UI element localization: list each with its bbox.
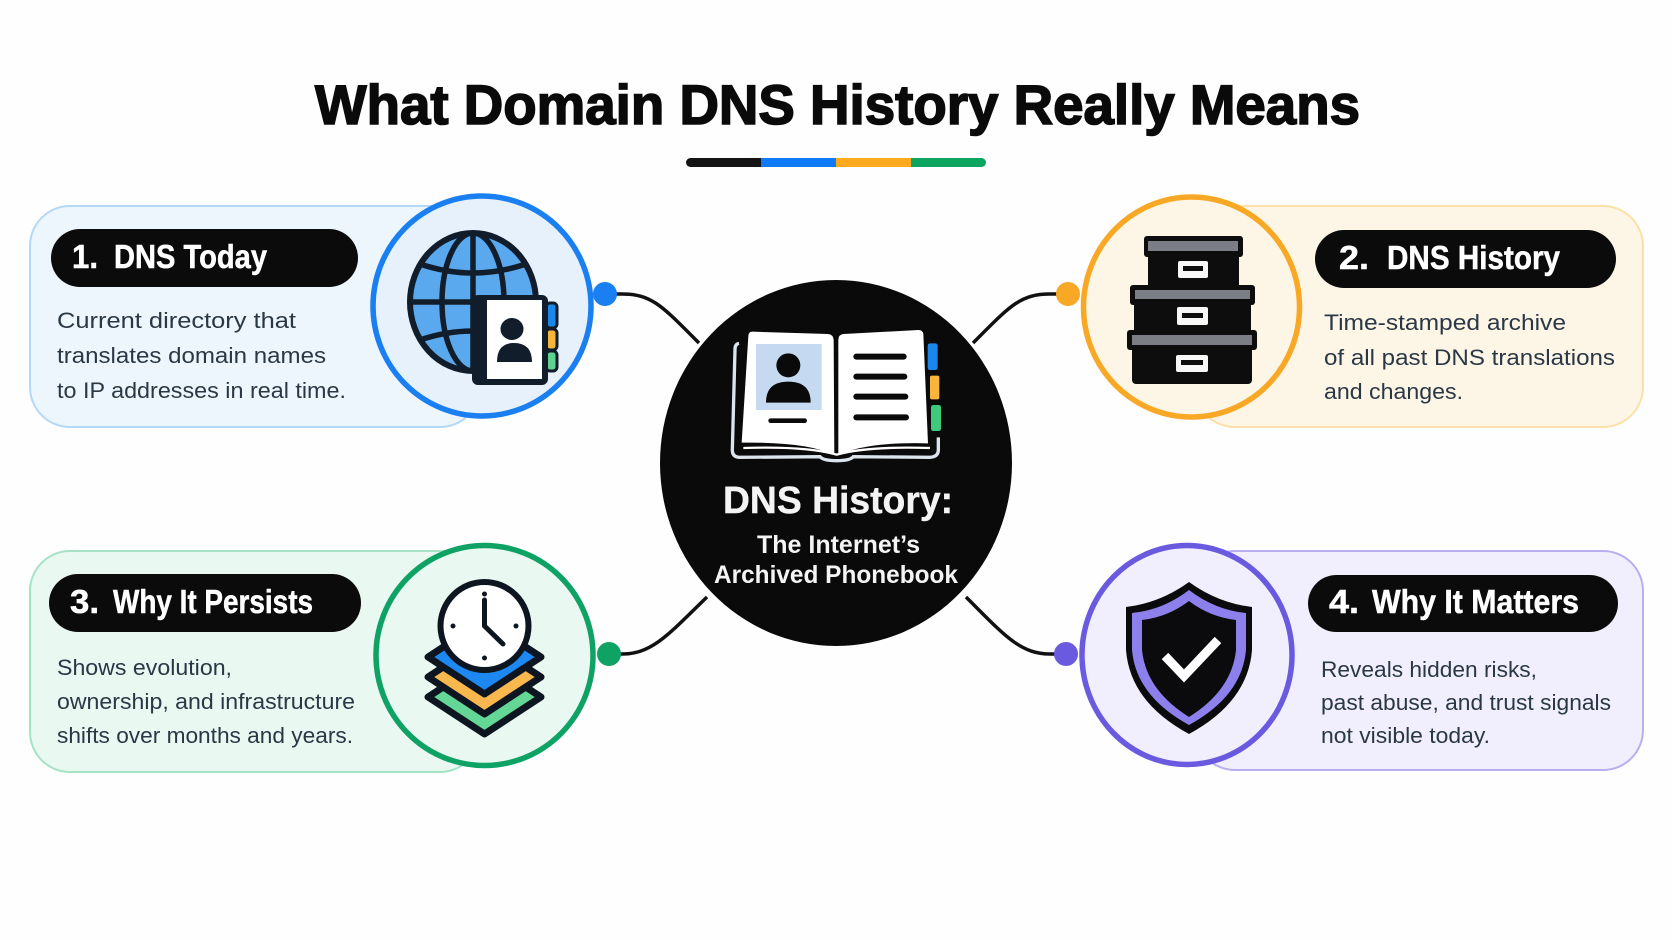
text: Why It Matters description: not visible today. [1321,723,1490,748]
central hub circle [660,280,1012,646]
connector: bottom left [597,597,707,666]
text: DNS Today description: Current directory that [57,308,296,333]
text: DNS History description: of all past DNS translations [1324,345,1615,370]
text: DNS Today description [57,308,346,403]
text: hub subheading [714,531,958,589]
text: DNS Today description: translates domain names [57,343,326,368]
text: Why It Matters description: past abuse, and trust signals [1321,690,1611,715]
connector: top left [593,282,699,343]
text: Why It Persists description: shifts over months and years. [57,723,353,748]
icon: stacked archive boxes [1127,236,1257,384]
icon: clock [440,582,528,670]
panel: Why It Matters [1082,546,1643,770]
heading pill: DNS History: 2. [1339,239,1369,276]
heading pill: Why It Matters: 4. [1329,583,1359,620]
heading pill: Why It Persists: 3. [70,583,99,620]
heading pill: DNS Today: DNS Today [114,238,268,275]
text: hub subheading: Archived Phonebook [714,561,958,589]
icon ring: globe and directory [373,196,591,416]
heading pill: DNS History: DNS History [1387,239,1561,276]
heading pill: Why It Persists [49,574,361,632]
panel: Why It Persists [30,546,593,772]
text: DNS History description [1324,310,1615,404]
heading pill: Why It Matters [1308,575,1618,632]
icon ring: clock and layers [376,546,593,766]
heading pill: DNS Today: 1. [72,238,98,275]
icon: stacked layers [428,620,541,734]
icon ring: shield [1082,546,1292,764]
text: Why It Persists description: ownership, and infrastructure [57,689,355,714]
text: Why It Persists description [57,655,355,748]
connector: bottom right [966,597,1078,666]
text: Why It Matters description: Reveals hidden risks, [1321,657,1537,682]
icon ring: archive boxes [1084,197,1300,417]
connector: top right [973,282,1080,343]
text: Why It Matters description [1321,657,1611,748]
title: What Domain DNS History Really Means [315,73,1360,136]
text: hub subheading: The Internet’s [757,531,920,559]
heading pill: DNS Today [51,229,358,287]
heading pill: Why It Matters: Why It Matters [1372,583,1579,620]
panel: DNS History [1084,197,1643,427]
text: Why It Persists description: Shows evolution, [57,655,232,680]
icon: open phonebook [732,330,941,461]
text: DNS History description: Time-stamped archive [1324,310,1566,335]
text: hub heading: DNS History: [723,480,953,522]
text: DNS Today description: to IP addresses in real time. [57,378,346,403]
title underline [686,158,986,167]
heading pill: DNS History [1315,230,1616,288]
icon: globe [410,233,536,371]
icon: directory card [472,295,557,385]
panel: DNS Today [30,196,591,427]
icon: shield with check [1126,582,1252,734]
heading pill: Why It Persists: Why It Persists [113,583,313,620]
text: DNS History description: and changes. [1324,379,1463,404]
